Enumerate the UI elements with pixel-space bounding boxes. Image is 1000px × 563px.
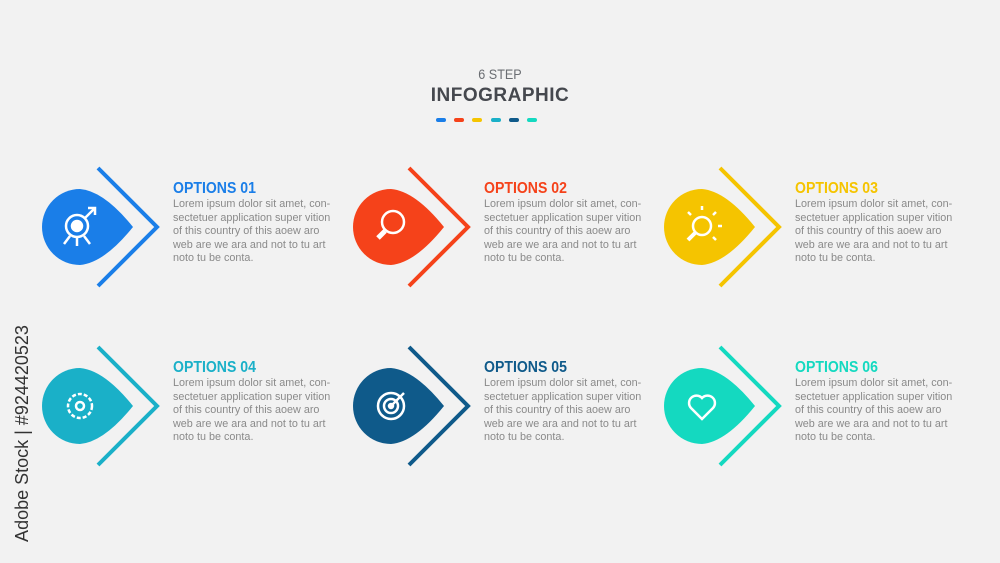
text: noto tu be conta. [795, 431, 875, 443]
text: sectetuer application super vition [484, 212, 641, 224]
text 04 [173, 359, 330, 443]
text: of this country of this aoew aro [795, 404, 941, 416]
text: noto tu be conta. [484, 431, 564, 443]
text 06 [795, 359, 952, 443]
text: sectetuer application super vition [795, 212, 952, 224]
text 01 [173, 180, 330, 264]
marker 03 [664, 168, 779, 286]
text: web are we ara and not to tu art [795, 418, 947, 430]
marker 06 [664, 347, 779, 465]
text: of this country of this aoew aro [173, 225, 319, 237]
icon: gender/target [64, 208, 95, 246]
title: 6 STEP [478, 66, 522, 82]
text: of this country of this aoew aro [484, 404, 630, 416]
text: noto tu be conta. [795, 252, 875, 264]
text 03 [795, 180, 952, 264]
watermark: Adobe Stock | #924420523 [12, 325, 32, 542]
text: Lorem ipsum dolor sit amet, con- [484, 198, 641, 210]
text: web are we ara and not to tu art [484, 239, 636, 251]
text: OPTIONS 03 [795, 180, 878, 197]
text: web are we ara and not to tu art [173, 239, 325, 251]
text: sectetuer application super vition [795, 391, 952, 403]
text: OPTIONS 02 [484, 180, 567, 197]
text: of this country of this aoew aro [795, 225, 941, 237]
text: of this country of this aoew aro [484, 225, 630, 237]
text: of this country of this aoew aro [173, 404, 319, 416]
text: web are we ara and not to tu art [173, 418, 325, 430]
text: Lorem ipsum dolor sit amet, con- [795, 377, 952, 389]
text: sectetuer application super vition [484, 391, 641, 403]
text: web are we ara and not to tu art [484, 418, 636, 430]
text: OPTIONS 05 [484, 359, 567, 376]
icon: target [378, 393, 404, 419]
marker 04 [42, 347, 157, 465]
text: noto tu be conta. [173, 252, 253, 264]
icon: magnifier [378, 211, 404, 238]
text: Lorem ipsum dolor sit amet, con- [484, 377, 641, 389]
text: OPTIONS 06 [795, 359, 878, 376]
text: sectetuer application super vition [173, 391, 330, 403]
marker 02 [353, 168, 468, 286]
text: OPTIONS 04 [173, 359, 256, 376]
color dashes [436, 118, 537, 122]
text: Lorem ipsum dolor sit amet, con- [173, 377, 330, 389]
text: sectetuer application super vition [173, 212, 330, 224]
text: OPTIONS 01 [173, 180, 256, 197]
icon: gear [68, 394, 92, 418]
text: noto tu be conta. [484, 252, 564, 264]
text: Lorem ipsum dolor sit amet, con- [795, 198, 952, 210]
title: INFOGRAPHIC [431, 85, 569, 106]
icon: heart [689, 396, 715, 419]
text 05 [484, 359, 641, 443]
text: Lorem ipsum dolor sit amet, con- [173, 198, 330, 210]
text 02 [484, 180, 641, 264]
text: web are we ara and not to tu art [795, 239, 947, 251]
title [431, 66, 569, 106]
marker 05 [353, 347, 468, 465]
icon: bulb [688, 206, 722, 240]
text: noto tu be conta. [173, 431, 253, 443]
marker 01 [42, 168, 157, 286]
